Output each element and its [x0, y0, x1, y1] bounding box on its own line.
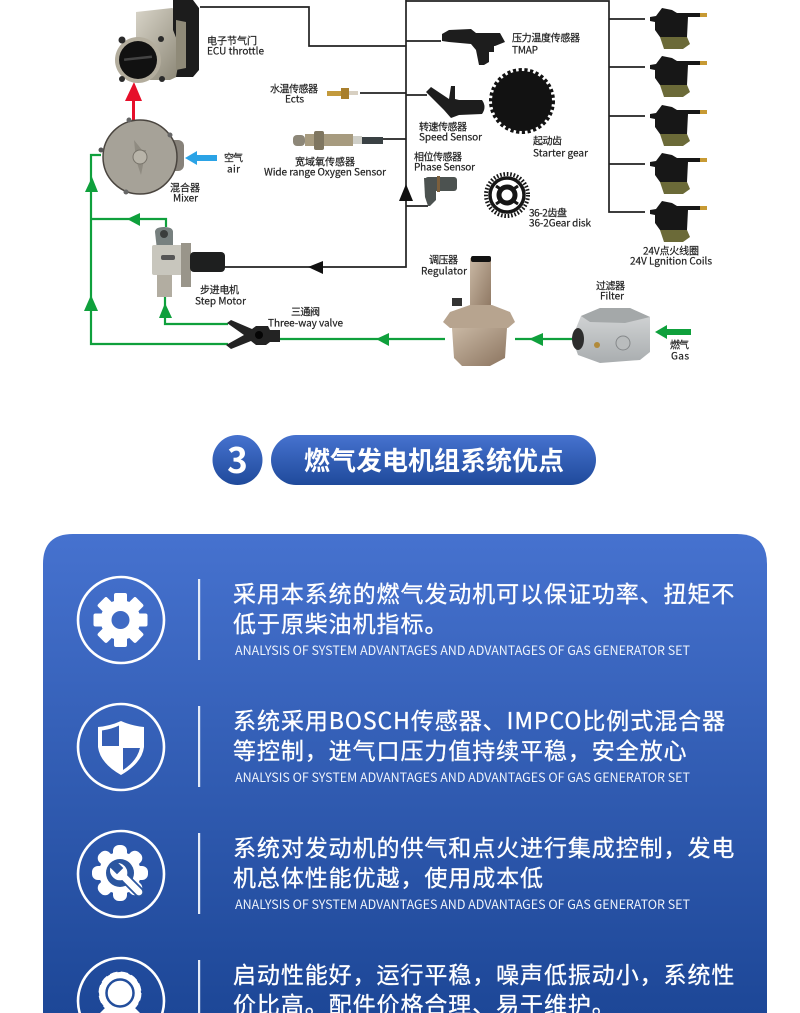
component labels: [170, 30, 712, 362]
component labels: 调压器: [429, 252, 458, 266]
component: step motor: [152, 227, 225, 297]
heading pill: [271, 435, 596, 485]
component: speed sensor: [426, 86, 484, 118]
advantage 2: [78, 702, 726, 790]
component labels: 宽域氧传感器: [295, 154, 355, 168]
component labels: Starter gear: [533, 144, 588, 160]
component labels: 起动齿: [533, 132, 562, 148]
component labels: 水温传感器: [270, 80, 318, 96]
icon: gear and wrench: [78, 831, 164, 917]
advantage 4 text: 启动性能好，运行平稳，噪声低振动小，系统性: [233, 956, 735, 990]
advantage 2 text: 等控制，进气口压力值持续平稳，安全放心: [233, 732, 687, 766]
green arrows: [84, 177, 691, 346]
component: oxygen sensor: [293, 131, 383, 150]
component labels: 24V点火线圈: [643, 242, 699, 258]
icon: medal: [78, 958, 164, 1013]
advantage 4 text: [233, 956, 735, 1013]
component labels: Phase Sensor: [414, 158, 475, 174]
advantage 2 text: ANALYSIS OF SYSTEM ADVANTAGES AND ADVANTAGES OF GAS GENERATOR SET: [235, 767, 690, 786]
component: phase sensor: [424, 176, 457, 206]
component: 36-2 gear disk: [486, 174, 528, 216]
red arrow: [125, 82, 142, 120]
component labels: 燃气: [670, 336, 689, 352]
green gas lines: [91, 155, 573, 344]
component: regulator: [443, 256, 515, 366]
advantage 1 text: [233, 575, 735, 659]
black signal wiring: [200, 0, 645, 267]
panel: system advantages: [43, 534, 767, 1013]
component labels: Mixer: [173, 190, 198, 204]
component labels: 相位传感器: [414, 148, 462, 164]
advantage 4: [78, 956, 735, 1013]
component labels: 转速传感器: [419, 118, 467, 134]
component: ECTS sensor: [327, 88, 358, 99]
advantage 1 text: ANALYSIS OF SYSTEM ADVANTAGES AND ADVANTAGES OF GAS GENERATOR SET: [235, 640, 690, 659]
component labels: 过滤器: [596, 278, 625, 292]
advantage 3: [78, 829, 735, 917]
component labels: 空气: [224, 150, 243, 164]
component labels: 步进电机: [200, 282, 239, 296]
component labels: 24V Lgnition Coils: [630, 252, 712, 268]
component: mixer: [98, 118, 184, 194]
component: filter: [572, 308, 650, 363]
advantage 3 text: 系统对发动机的供气和点火进行集成控制，发电: [233, 829, 735, 863]
section heading: [212, 433, 596, 485]
component labels: Three-way valve: [268, 314, 343, 330]
advantage 1 text: 采用本系统的燃气发动机可以保证功率、扭矩不: [233, 575, 735, 609]
advantage 3 text: 机总体性能优越，使用成本低: [233, 859, 544, 893]
icon: gear: [78, 577, 164, 663]
component labels: Wide range Oxygen Sensor: [264, 164, 386, 178]
advantage 1 text: 低于原柴油机指标。: [233, 605, 448, 639]
component: three-way valve: [226, 320, 280, 349]
component labels: Gas: [671, 348, 689, 362]
component: TMAP sensor: [442, 29, 505, 65]
component labels: Ects: [285, 90, 304, 106]
number badge: 3: [227, 433, 248, 484]
component labels: Step Motor: [195, 292, 246, 308]
advantage 1: [78, 575, 735, 663]
component labels: 电子节气门: [207, 32, 257, 48]
component labels: Regulator: [421, 262, 467, 278]
advantage 3 text: [233, 829, 735, 913]
blue arrow: [185, 151, 217, 165]
icon: shield: [78, 704, 164, 790]
advantage 2 text: [233, 702, 726, 786]
component labels: 36-2Gear disk: [529, 214, 591, 230]
black arrows: [308, 184, 413, 274]
component labels: ECU throttle: [207, 42, 264, 58]
wiring diagram: [84, 0, 712, 366]
component: ECU throttle: [115, 0, 199, 83]
component: ignition coils: [650, 8, 707, 242]
component labels: Speed Sensor: [419, 128, 482, 144]
component: starter gear: [491, 70, 553, 132]
number badge: [212, 433, 262, 485]
component labels: 压力温度传感器: [512, 30, 580, 44]
component labels: Filter: [600, 288, 624, 302]
advantage 2 text: 系统采用BOSCH传感器、IMPCO比例式混合器: [233, 702, 726, 736]
component labels: air: [227, 160, 240, 176]
component labels: 36-2齿盘: [529, 204, 567, 220]
advantage 3 text: ANALYSIS OF SYSTEM ADVANTAGES AND ADVANTAGES OF GAS GENERATOR SET: [235, 894, 690, 913]
heading pill: 燃气发电机组系统优点: [304, 441, 564, 478]
component labels: 混合器: [170, 180, 200, 194]
component labels: TMAP: [512, 42, 538, 56]
component labels: 三通阀: [291, 304, 320, 318]
